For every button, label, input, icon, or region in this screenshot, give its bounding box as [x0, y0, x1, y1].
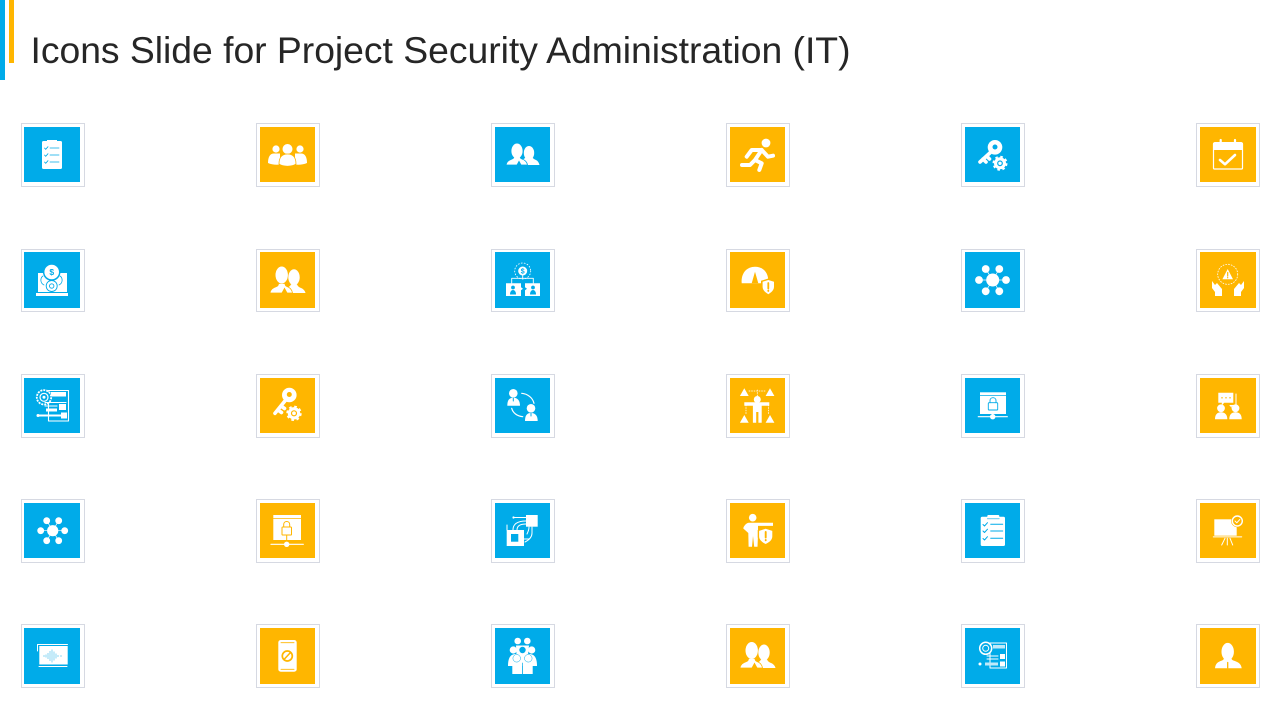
tile: settings document [22, 374, 84, 438]
tile: connected hub small [22, 500, 84, 562]
icon: settings document small [978, 642, 1006, 668]
icon: single person [1215, 643, 1242, 668]
icon: secure screen large [271, 515, 303, 547]
icon: people exchange [507, 389, 538, 421]
tile: risk gauge with shield [726, 250, 790, 312]
icon: key and gear [980, 140, 1007, 170]
tile: two people [492, 124, 554, 186]
icon: funding flow between two people: $ [521, 268, 525, 276]
tile: running person [726, 124, 790, 186]
icon: two people large [270, 266, 306, 293]
title: Icons Slide for Project Security Administration (IT) [30, 29, 850, 71]
icon: calendar check [1213, 140, 1243, 169]
tile: single person [1196, 624, 1260, 688]
icon: two people repeat [740, 642, 776, 668]
icon: blocked mobile phone [278, 640, 297, 672]
tile: checklist clipboard [22, 124, 84, 186]
tile: person pointing with shield [726, 500, 790, 562]
icon: audio waveform screen [38, 644, 68, 666]
tile: audio waveform screen [22, 624, 84, 688]
tile: connected hub [962, 250, 1024, 312]
tile: settings document small [962, 624, 1024, 688]
icon: secure screen [978, 392, 1007, 419]
icon: person pointing with shield [743, 514, 774, 547]
icon: circuit chips [507, 515, 538, 546]
tile: hands holding warning [1196, 250, 1260, 312]
icon: settings document [36, 390, 68, 421]
icon: presentation board with check [1213, 515, 1244, 545]
icon: checklist clipboard [42, 140, 62, 169]
tile: blocked mobile phone [256, 624, 320, 688]
tile: clipboard checklist large [962, 500, 1024, 562]
tile: two people large [256, 250, 320, 312]
icon: laptop with coin and gear: $ [49, 267, 54, 277]
tile: key and gear large [256, 374, 320, 438]
icon: connected hub small [37, 517, 68, 544]
tile: presentation board with check [1196, 500, 1260, 562]
tile: key and gear [962, 124, 1024, 186]
tile: people exchange [492, 374, 554, 438]
tile: team of three [256, 124, 320, 186]
tile: calendar check [1196, 124, 1260, 186]
tile: laptop with coin and gear [22, 250, 84, 312]
tile: person surrounded by hazards [726, 374, 790, 438]
icon: key and gear large [275, 388, 301, 420]
tile: two people in conversation [1196, 374, 1260, 438]
tile: secure screen [962, 374, 1024, 438]
accent bars [0, 0, 14, 80]
icon: connected hub [975, 265, 1010, 295]
icon: risk gauge with shield [742, 267, 776, 296]
tile: two people repeat [726, 624, 790, 688]
icon: running person [742, 139, 773, 170]
tile: funding flow between two people [492, 250, 554, 312]
tile: group of people [492, 624, 554, 688]
icon: clipboard checklist large [981, 515, 1005, 546]
icon: two people [506, 144, 540, 165]
icon: hands holding warning [1212, 264, 1244, 296]
icon: two people in conversation [1215, 393, 1242, 419]
icon: team of three [268, 144, 307, 166]
tile: secure screen large [256, 500, 320, 562]
tile: circuit chips [492, 500, 554, 562]
icon: person surrounded by hazards [740, 388, 774, 423]
icon: group of people [508, 638, 537, 674]
